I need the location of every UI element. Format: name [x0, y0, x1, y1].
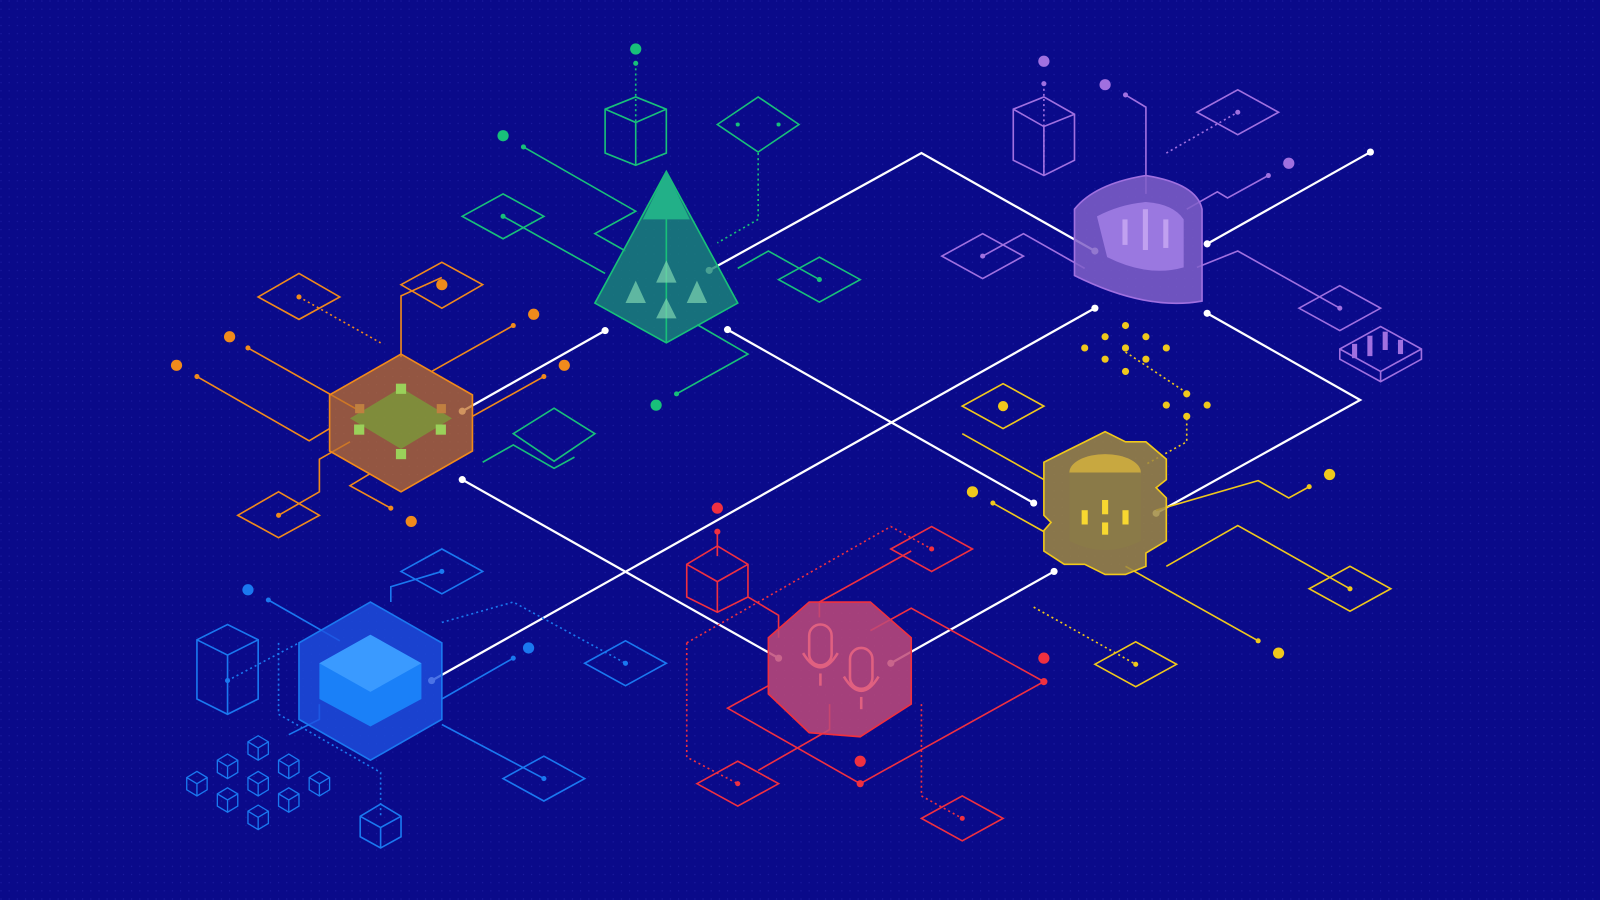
node: orange cube [171, 262, 570, 538]
node: yellow gear [962, 322, 1391, 687]
network: white connector lines [428, 148, 1374, 684]
node: red octagon [687, 503, 1049, 841]
node: green pyramid [462, 43, 860, 468]
node: purple shield [942, 56, 1421, 382]
node: blue cube [187, 549, 666, 848]
